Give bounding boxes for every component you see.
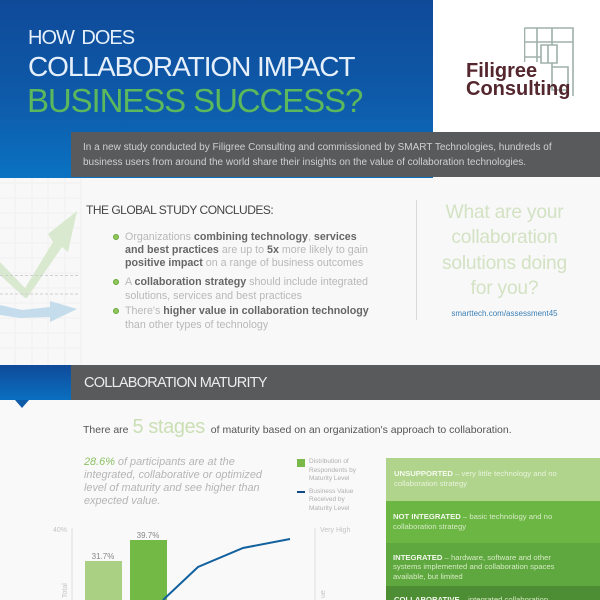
legend label: distribution: Maturity Level	[309, 475, 349, 482]
stage: not integrated	[386, 501, 600, 543]
chart graphic with arrows	[0, 211, 78, 322]
bar: not integrated	[130, 531, 167, 600]
maturity summary text: expected value.	[84, 495, 160, 507]
left axis labels: Total	[62, 583, 69, 598]
logo wordmark	[466, 60, 570, 100]
call to action question: for you?	[471, 278, 538, 299]
bullet 3: There's higher value in collaboration technology	[125, 305, 369, 317]
intro text: business users from around the world share their insights on the value of collaboration technologies.	[83, 156, 526, 168]
maturity summary text: 28.6% of participants are at the	[84, 456, 235, 468]
bullet 1: Organizations combining technology, services	[125, 231, 357, 243]
right axis labels: ue	[320, 590, 327, 598]
bar: unsupported	[85, 552, 122, 600]
maturity summary text: integrated, collaborative or optimized	[84, 469, 262, 481]
section heading: COLLABORATION MATURITY	[84, 375, 267, 391]
bar: not integrated: 39.7%	[137, 531, 159, 540]
vertical divider	[416, 200, 417, 320]
stage: unsupported: UNSUPPORTED – very little technology and no	[394, 468, 557, 478]
logo panel	[433, 0, 600, 132]
logo grid icon	[524, 27, 574, 96]
legend label: business value: Received by	[309, 496, 345, 503]
call to action question: What are your	[446, 202, 563, 223]
right axis labels: Very High	[320, 527, 350, 534]
legend label: distribution	[309, 458, 356, 482]
bullet dot	[113, 279, 119, 285]
bullet 1	[113, 231, 368, 269]
bullet 3	[113, 305, 369, 330]
title line 2: COLLABORATION IMPACT	[28, 51, 354, 82]
bar: unsupported: 31.7%	[92, 552, 114, 561]
legend label: distribution: Distribution of	[309, 458, 349, 465]
legend label: business value: Maturity Level	[309, 504, 349, 512]
maturity summary text	[84, 456, 262, 507]
section heading bar	[71, 365, 600, 400]
bullet 2: solutions, services and best practices	[125, 290, 302, 302]
business value line	[163, 539, 290, 600]
stages sentence: There are 5 stages of maturity based on an organization's approach to collaboration.	[83, 416, 512, 438]
stage: integrated: systems implemented and collaboration spaces	[393, 562, 555, 571]
left axis labels: 40%	[53, 527, 67, 534]
maturity summary text: level of maturity and see higher than	[84, 482, 260, 494]
stage: collaborative	[386, 586, 600, 600]
title line 1: HOW DOES	[28, 27, 134, 49]
assessment link: smarttech.com/assessment45	[451, 309, 558, 318]
stage: unsupported	[386, 458, 600, 501]
bullet dot	[113, 308, 119, 314]
call to action question	[442, 202, 567, 299]
stage: not integrated: collaboration strategy	[393, 522, 466, 530]
stage: integrated: INTEGRATED – hardware, software and other	[393, 552, 551, 562]
intro text: In a new study conducted by Filigree Consulting and commissioned by SMART Technologies, hundreds of	[83, 142, 552, 153]
bullet 2	[113, 276, 368, 302]
legend label: distribution: Respondents by	[309, 466, 356, 474]
header panel	[0, 0, 433, 178]
section band blue	[0, 365, 71, 400]
title line 3: BUSINESS SUCCESS?	[27, 82, 362, 119]
study heading: THE GLOBAL STUDY CONCLUDES:	[86, 203, 273, 217]
section pointer	[15, 400, 29, 408]
bullet 1: and best practices are up to 5x more likely to gain	[125, 244, 368, 256]
logo wordmark: Consulting	[466, 78, 570, 100]
right axis labels	[320, 527, 350, 598]
stage: integrated: available, but limited	[393, 572, 463, 581]
panel: conclusions	[0, 178, 600, 365]
maturity stages panel	[386, 458, 600, 600]
bullet 3: than other types of technology	[125, 318, 268, 330]
bar and line chart	[53, 526, 350, 600]
legend swatch: business value	[297, 491, 305, 493]
call to action question: collaboration	[451, 227, 558, 248]
intro bar	[71, 132, 600, 177]
legend	[297, 458, 356, 512]
bullet 1: positive impact on a range of business outcomes	[125, 257, 363, 269]
bullet dot	[113, 234, 119, 240]
stage: unsupported: collaboration strategy	[394, 478, 467, 488]
left axis labels	[53, 527, 69, 598]
stage: not integrated: NOT INTEGRATED – basic technology and no	[393, 512, 552, 520]
stage: integrated	[386, 543, 600, 586]
logo wordmark: Filigree	[466, 60, 537, 82]
legend label: business value	[309, 488, 354, 512]
bullet 2: A collaboration strategy should include integrated	[125, 276, 368, 288]
legend swatch: distribution	[297, 459, 305, 467]
intro text	[83, 142, 552, 168]
call to action question: solutions doing	[442, 253, 567, 274]
legend label: business value: Business Value	[309, 488, 353, 494]
